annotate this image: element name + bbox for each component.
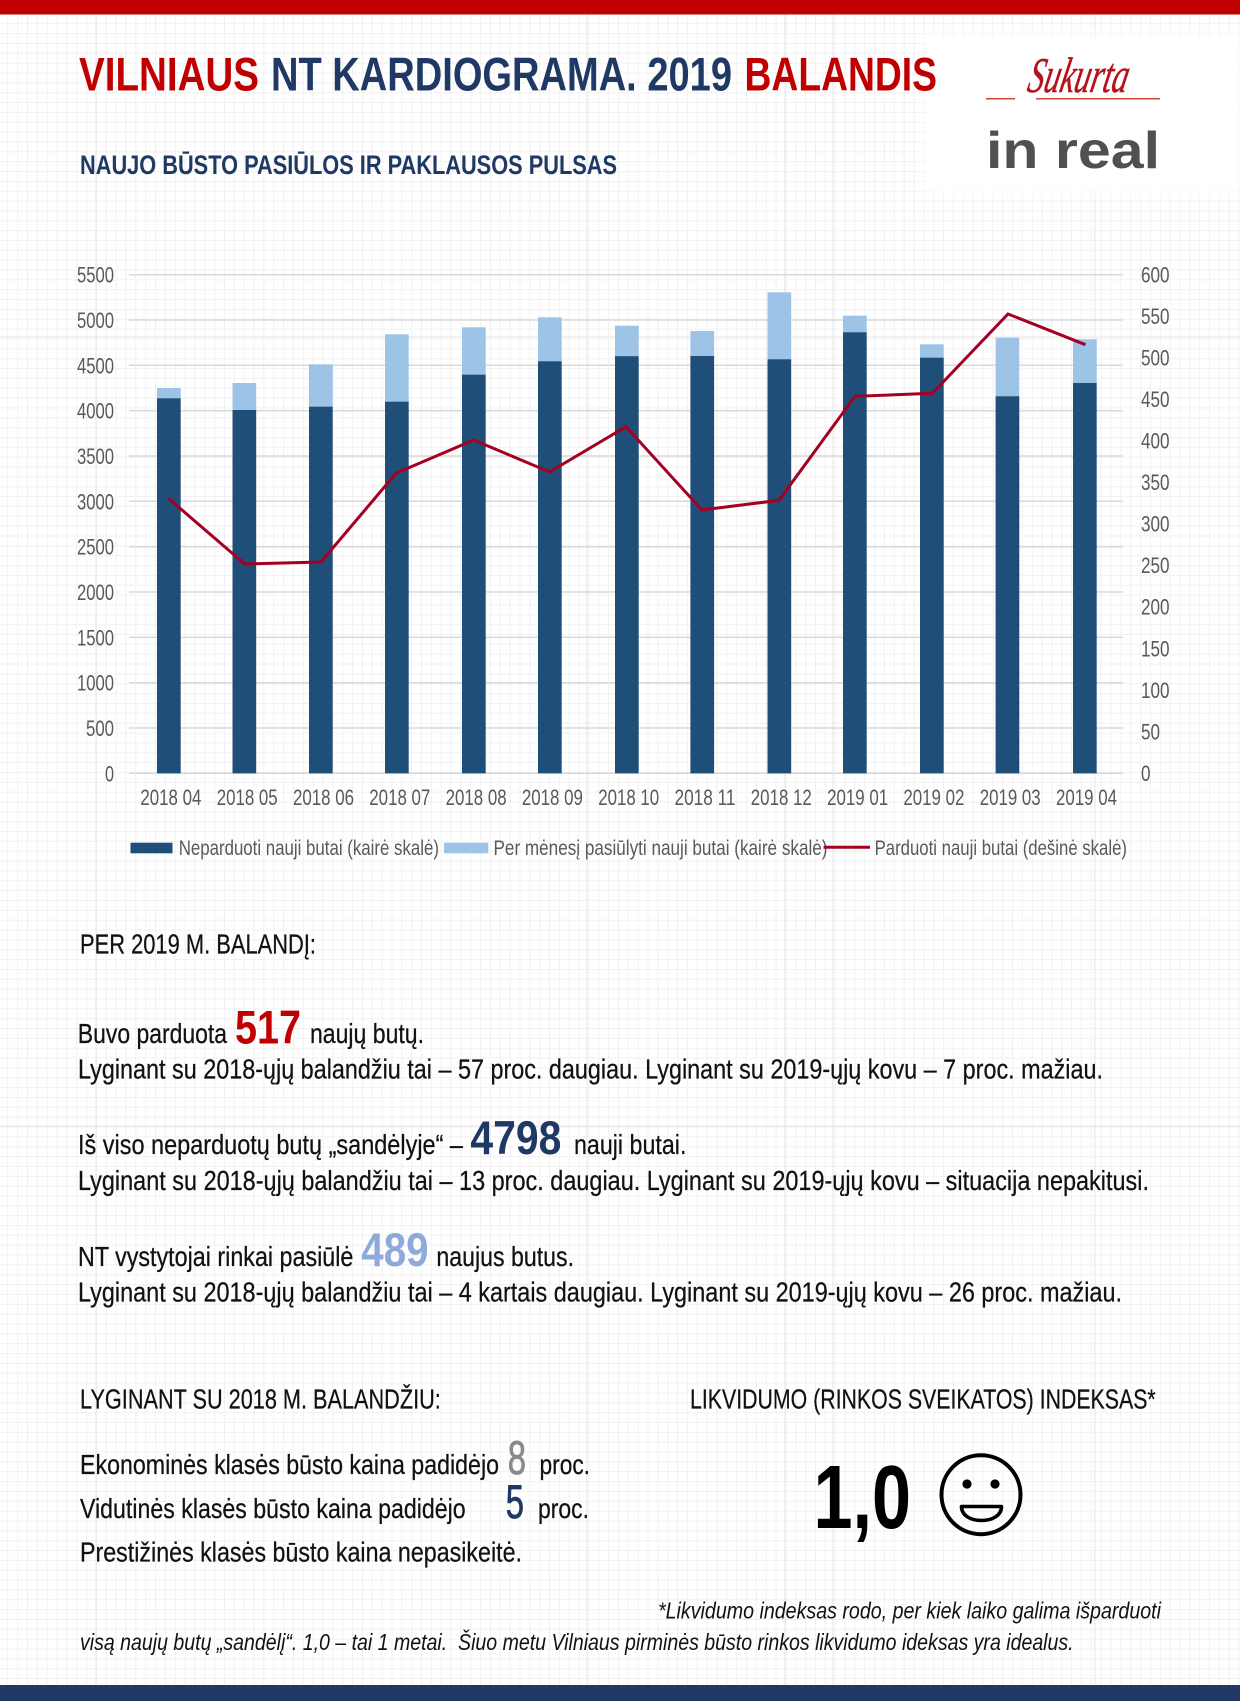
title: BALANDIS	[744, 48, 937, 101]
chart legend: Neparduoti nauji butai (kairė skalė)	[179, 836, 439, 860]
footnote: *Likvidumo indeksas rodo, per kiek laiko galima išparduoti	[658, 1597, 1162, 1623]
section heading: per 2019 m. balandį: PER 2019 M. BALANDĮ:	[80, 928, 316, 959]
text block: offered flats: naujus butus.	[436, 1241, 574, 1272]
icon: smiley face	[942, 1455, 1020, 1534]
right axis labels: 200	[1141, 595, 1170, 620]
footnote	[80, 1597, 1162, 1655]
right axis labels: 250	[1141, 553, 1170, 578]
left axis labels: 3000	[77, 489, 114, 514]
chart legend: Parduoti nauji butai (dešinė skalė)	[875, 836, 1127, 860]
right axis labels: 600	[1141, 262, 1170, 287]
left axis labels: 500	[86, 716, 114, 741]
left axis labels: 2000	[77, 580, 114, 605]
sold flats line	[168, 314, 1085, 564]
chart legend: Per mėnesį pasiūlyti nauji butai (kairė skalė)	[494, 836, 828, 860]
x axis labels: 2018 07	[369, 785, 430, 810]
right axis labels: 100	[1141, 678, 1170, 703]
right axis labels: 400	[1141, 428, 1170, 454]
combo chart	[77, 262, 1170, 860]
left axis labels: 5000	[77, 308, 114, 333]
chart legend	[130, 836, 1127, 860]
left axis labels: 5500	[77, 263, 114, 288]
panel: liquidity index	[690, 1383, 1156, 1548]
logo: sukurta in real: in real	[986, 122, 1160, 180]
logo: sukurta in real: Sukurta	[1024, 47, 1135, 103]
x axis labels: 2019 04	[1056, 785, 1117, 810]
liquidity value: 1,0	[814, 1448, 911, 1548]
x axis labels: 2019 01	[827, 785, 888, 810]
title	[79, 48, 937, 101]
left axis labels: 0	[105, 761, 114, 786]
panel: price changes compared with April 2018: proc.	[538, 1493, 589, 1524]
number: 517: 517	[235, 1000, 301, 1053]
x axis labels: 2018 08	[446, 785, 507, 810]
panel: price changes compared with April 2018: Vidutinės klasės būsto kaina padidėjo	[80, 1493, 466, 1524]
panel: price changes compared with April 2018	[80, 1383, 590, 1568]
right axis labels	[1141, 262, 1170, 786]
dark bars: unsold flats	[157, 332, 1097, 773]
x axis labels: 2018 10	[598, 785, 659, 810]
text block: sold flats: naujų butų.	[310, 1018, 424, 1049]
panel: price changes compared with April 2018: LYGINANT SU 2018 M. BALANDŽIU:	[80, 1383, 441, 1414]
right axis labels: 150	[1141, 636, 1170, 661]
title: VILNIAUS	[79, 48, 259, 101]
text block: unsold flats: Iš viso neparduotų butų „sandėlyje“ –	[78, 1129, 464, 1160]
left axis labels: 4000	[77, 399, 114, 424]
title: NT KARDIOGRAMA. 2019	[271, 48, 732, 101]
panel: price changes compared with April 2018: proc.	[540, 1449, 590, 1480]
logo: sukurta in real	[986, 47, 1160, 180]
footnote: visą naujų butų „sandėlį“. 1,0 – tai 1 metai. Šiuo metu Vilniaus pirminės būsto rinkos likvidumo ideksas yra idealus.	[80, 1628, 1074, 1655]
number: 8: 8	[508, 1431, 526, 1484]
panel: price changes compared with April 2018: Ekonominės klasės būsto kaina padidėjo	[80, 1449, 499, 1480]
x axis labels: 2018 11	[674, 785, 736, 810]
right axis labels: 50	[1141, 719, 1160, 744]
right axis labels: 0	[1141, 761, 1150, 786]
right axis labels: 300	[1141, 512, 1170, 537]
left axis labels	[77, 263, 114, 786]
number: 4798: 4798	[470, 1111, 561, 1164]
right axis labels: 450	[1141, 387, 1170, 412]
text block: offered flats: NT vystytojai rinkai pasiūlė	[78, 1241, 353, 1272]
x axis labels: 2018 06	[293, 785, 354, 810]
right axis labels: 350	[1141, 470, 1170, 495]
x axis labels: 2019 03	[980, 785, 1041, 810]
text block: unsold flats: nauji butai.	[574, 1129, 686, 1160]
text block: sold flats	[78, 1000, 1103, 1084]
number: 489: 489	[361, 1223, 428, 1276]
bottom navy bar	[0, 1685, 1240, 1701]
top red bar	[0, 0, 1240, 14]
text block: sold flats: Buvo parduota	[78, 1018, 228, 1049]
x axis labels	[140, 785, 1117, 810]
left axis labels: 2500	[77, 535, 114, 560]
light bars: newly offered flats	[157, 292, 1097, 411]
right axis labels: 550	[1141, 304, 1170, 329]
x axis labels: 2018 09	[522, 785, 583, 810]
x axis labels: 2019 02	[903, 785, 964, 810]
x axis labels: 2018 12	[751, 785, 812, 810]
left axis labels: 1500	[77, 625, 114, 650]
left axis labels: 3500	[77, 444, 114, 469]
right axis labels: 500	[1141, 345, 1170, 370]
text block: unsold flats	[78, 1111, 1149, 1196]
left axis labels: 4500	[77, 353, 114, 378]
subtitle: NAUJO BŪSTO PASIŪLOS IR PAKLAUSOS PULSAS	[80, 150, 617, 180]
x axis labels: 2018 05	[217, 785, 278, 810]
left axis labels: 1000	[77, 671, 114, 696]
number: 5: 5	[506, 1475, 524, 1528]
text block: offered flats	[78, 1223, 1122, 1308]
panel: price changes compared with April 2018: Prestižinės klasės būsto kaina nepasikeitė.	[80, 1537, 522, 1568]
x axis labels: 2018 04	[140, 785, 201, 810]
